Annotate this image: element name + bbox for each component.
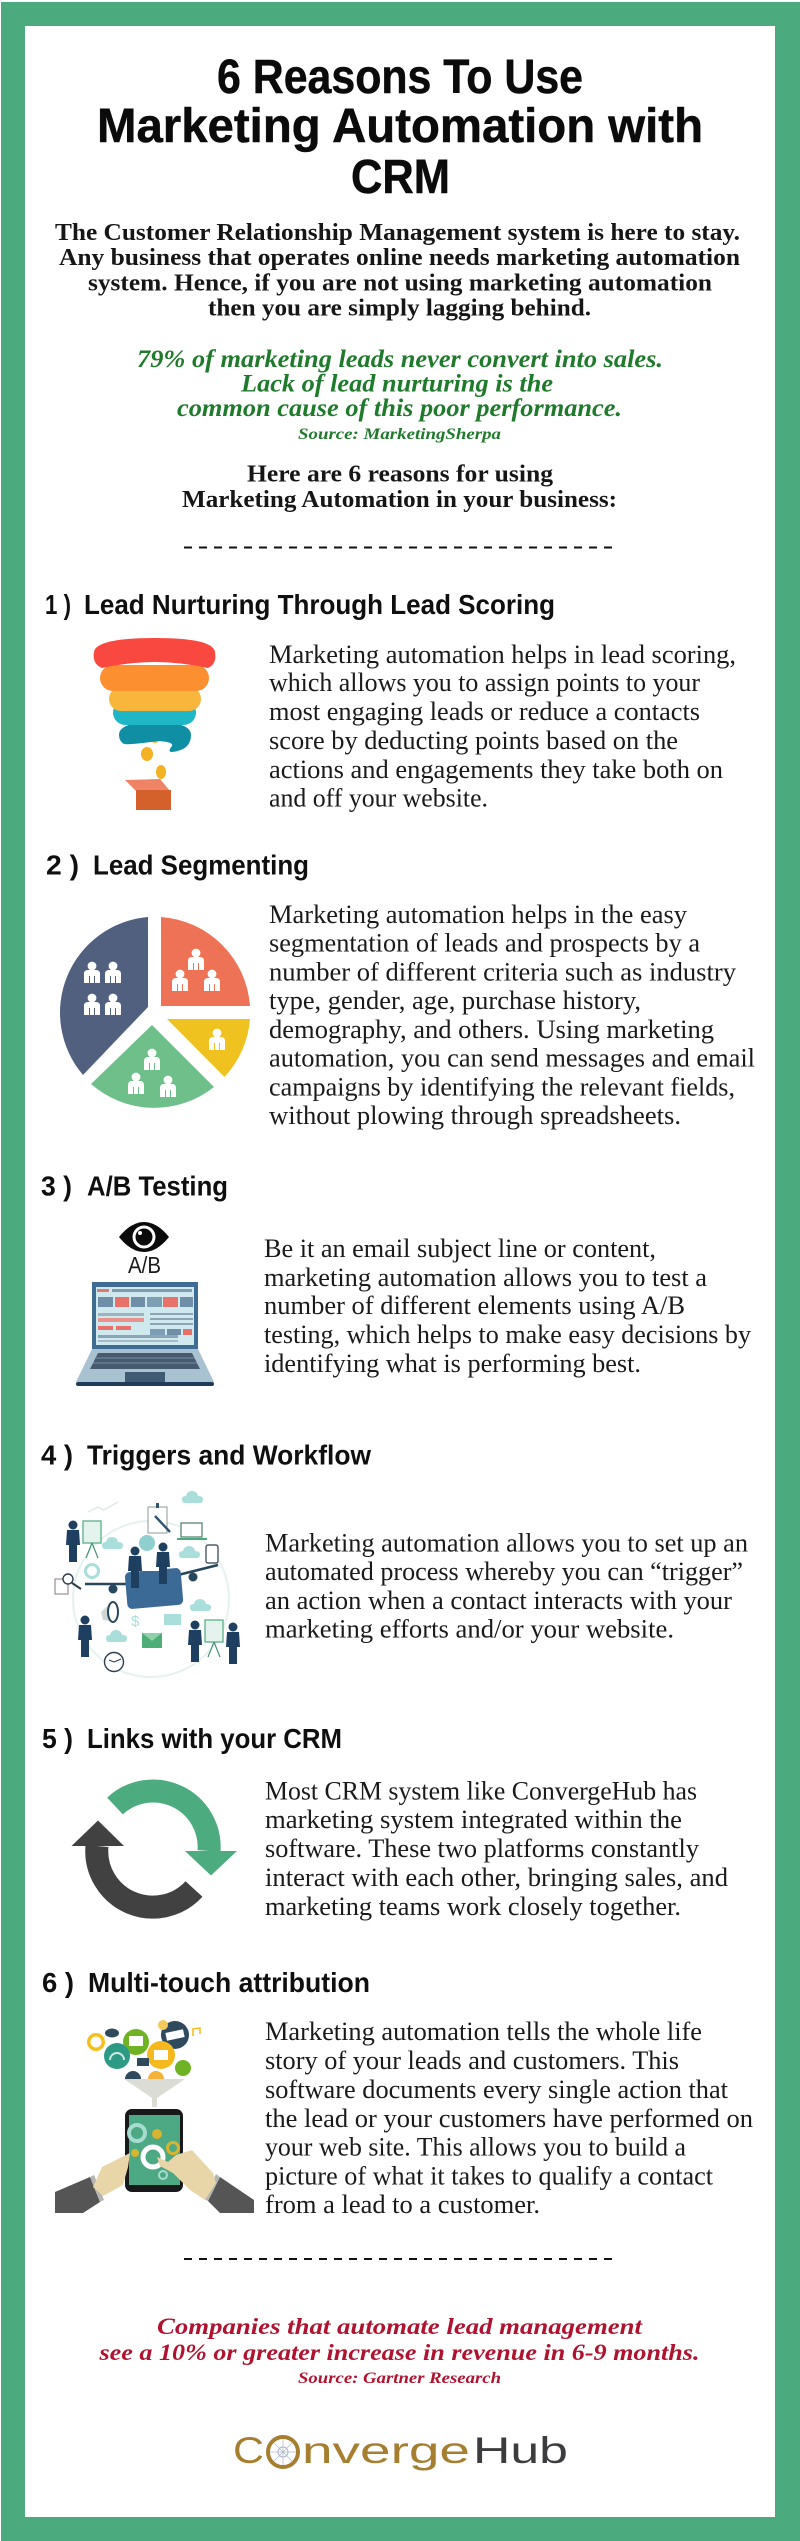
panel: reason 3 bbox=[41, 1170, 751, 1386]
red statistic callout bbox=[98, 2314, 700, 2387]
text block 1: Marketing automation helps in lead scoring, bbox=[269, 640, 736, 669]
text block 2: number of different criteria such as industry bbox=[269, 958, 736, 986]
text block 1: actions and engagements they take both on bbox=[269, 755, 723, 784]
panel: reason 2 bbox=[46, 850, 755, 1130]
heading 6: 6 ) bbox=[42, 1967, 74, 1998]
text block 1: and off your website. bbox=[269, 784, 488, 812]
text block 6: story of your leads and customers. This bbox=[265, 2046, 679, 2075]
text block 3: marketing automation allows you to test a bbox=[264, 1263, 707, 1292]
text block 5 bbox=[265, 1776, 728, 1921]
panel: reason 6 bbox=[42, 1967, 753, 2219]
text block 1: most engaging leads or reduce a contacts bbox=[269, 697, 700, 726]
green statistic callout: Lack of lead nurturing is the bbox=[240, 370, 553, 398]
heading 3: 3 ) bbox=[41, 1170, 72, 1202]
intro paragraph: system. Hence, if you are not using marketing automation bbox=[88, 270, 712, 296]
green statistic callout: Source: MarketingSherpa bbox=[298, 426, 501, 443]
text block 3: testing, which helps to make easy decisions by bbox=[264, 1320, 751, 1349]
text block 3 bbox=[264, 1234, 751, 1378]
text block 6: the lead or your customers have performed on bbox=[265, 2104, 753, 2133]
icon: colourful funnel with coins and chest bbox=[94, 638, 215, 810]
heading 5: Links with your CRM bbox=[87, 1723, 342, 1754]
text block 2: without plowing through spreadsheets. bbox=[269, 1101, 681, 1130]
icon: circular sync arrows bbox=[72, 1791, 237, 1907]
title: CRM bbox=[351, 151, 450, 204]
pie chart with people icons bbox=[60, 917, 250, 1108]
text block 6: picture of what it takes to qualify a contact bbox=[265, 2162, 714, 2190]
intro paragraph: then you are simply lagging behind. bbox=[208, 296, 591, 322]
ConvergeHub logo: C bbox=[233, 2430, 264, 2471]
panel: reason 4 bbox=[41, 1440, 748, 1677]
text block 5: Most CRM system like ConvergeHub has bbox=[265, 1776, 697, 1806]
heading 3: A/B Testing bbox=[87, 1170, 228, 1202]
text block 1: score by deducting points based on the bbox=[269, 726, 678, 755]
text block 3: number of different elements using A/B bbox=[264, 1291, 685, 1320]
heading 2: Lead Segmenting bbox=[93, 850, 309, 880]
title bbox=[97, 51, 703, 204]
text block 5: software. These two platforms constantly bbox=[265, 1834, 699, 1863]
text block 4: Marketing automation allows you to set up an bbox=[265, 1528, 748, 1558]
text block 3: identifying what is performing best. bbox=[264, 1349, 641, 1378]
red statistic callout: Source: Gartner Research bbox=[298, 2370, 501, 2387]
text block 2: automation, you can send messages and email bbox=[269, 1044, 755, 1072]
panel: reason 1 bbox=[45, 589, 736, 812]
text block 2: demography, and others. Using marketing bbox=[269, 1015, 714, 1044]
green statistic callout: common cause of this poor performance. bbox=[177, 395, 622, 422]
green statistic callout: 79% of marketing leads never convert into sales. bbox=[137, 346, 663, 373]
intro paragraph bbox=[55, 220, 740, 322]
text block 4: automated process whereby you can “trigger” bbox=[265, 1557, 743, 1586]
text block 2: campaigns by identifying the relevant fields, bbox=[269, 1072, 735, 1102]
text block 6: from a lead to a customer. bbox=[265, 2190, 540, 2219]
text block 5: marketing system integrated within the bbox=[265, 1805, 682, 1834]
text block 1: which allows you to assign points to your bbox=[269, 668, 700, 697]
illustration: team around a business plane: $ bbox=[131, 1613, 140, 1630]
red statistic callout: Companies that automate lead management bbox=[157, 2314, 643, 2339]
text block 2: type, gender, age, purchase history, bbox=[269, 986, 641, 1015]
heading 1: 1 ) bbox=[45, 589, 71, 620]
lead-in text: Here are 6 reasons for using bbox=[247, 462, 553, 488]
heading 5: 5 ) bbox=[42, 1723, 73, 1754]
title: Marketing Automation with bbox=[97, 100, 703, 153]
text block 4: an action when a contact interacts with your bbox=[265, 1586, 732, 1615]
title: 6 Reasons To Use bbox=[217, 51, 583, 104]
text block 5: interact with each other, bringing sales, and bbox=[265, 1863, 728, 1892]
panel: reason 5 bbox=[42, 1723, 728, 1921]
text block 6 bbox=[265, 2017, 753, 2219]
text block 1 bbox=[269, 640, 736, 812]
text block 2 bbox=[269, 900, 755, 1130]
ConvergeHub logo: nverge bbox=[302, 2430, 470, 2471]
green statistic callout bbox=[137, 346, 663, 443]
intro paragraph: The Customer Relationship Management system is here to stay. bbox=[55, 220, 740, 246]
text block 4: marketing efforts and/or your website. bbox=[265, 1614, 674, 1644]
text block 6: your web site. This allows you to build a bbox=[265, 2132, 686, 2162]
intro paragraph: Any business that operates online needs marketing automation bbox=[59, 245, 740, 271]
text block 6: software documents every single action that bbox=[265, 2075, 729, 2104]
ConvergeHub logo: Hub bbox=[473, 2430, 568, 2471]
heading 1: Lead Nurturing Through Lead Scoring bbox=[84, 589, 555, 620]
lead-in text: Marketing Automation in your business: bbox=[182, 487, 617, 513]
heading 6: Multi-touch attribution bbox=[88, 1967, 370, 1998]
heading 4: Triggers and Workflow bbox=[87, 1440, 371, 1470]
text block 2: segmentation of leads and prospects by a bbox=[269, 928, 700, 958]
text block 3: Be it an email subject line or content, bbox=[264, 1234, 656, 1263]
red statistic callout: see a 10% or greater increase in revenue in 6-9 months. bbox=[98, 2340, 700, 2365]
heading 2: 2 ) bbox=[46, 850, 79, 880]
icon: laptop showing test layout bbox=[76, 1282, 214, 1386]
text block 4 bbox=[265, 1528, 748, 1644]
icon: eye with A/B label bbox=[119, 1222, 169, 1278]
text block 6: Marketing automation tells the whole life bbox=[265, 2017, 702, 2046]
lead-in text bbox=[182, 462, 617, 513]
heading 4: 4 ) bbox=[41, 1440, 73, 1470]
illustration: team around a business plane bbox=[55, 1491, 240, 1677]
icon: eye with A/B label: A/B bbox=[128, 1252, 161, 1278]
ConvergeHub logo bbox=[233, 2430, 568, 2471]
text block 2: Marketing automation helps in the easy bbox=[269, 900, 687, 929]
illustration: hands on tablet with app funnel bbox=[55, 2020, 254, 2213]
text block 5: marketing teams work closely together. bbox=[265, 1892, 681, 1921]
